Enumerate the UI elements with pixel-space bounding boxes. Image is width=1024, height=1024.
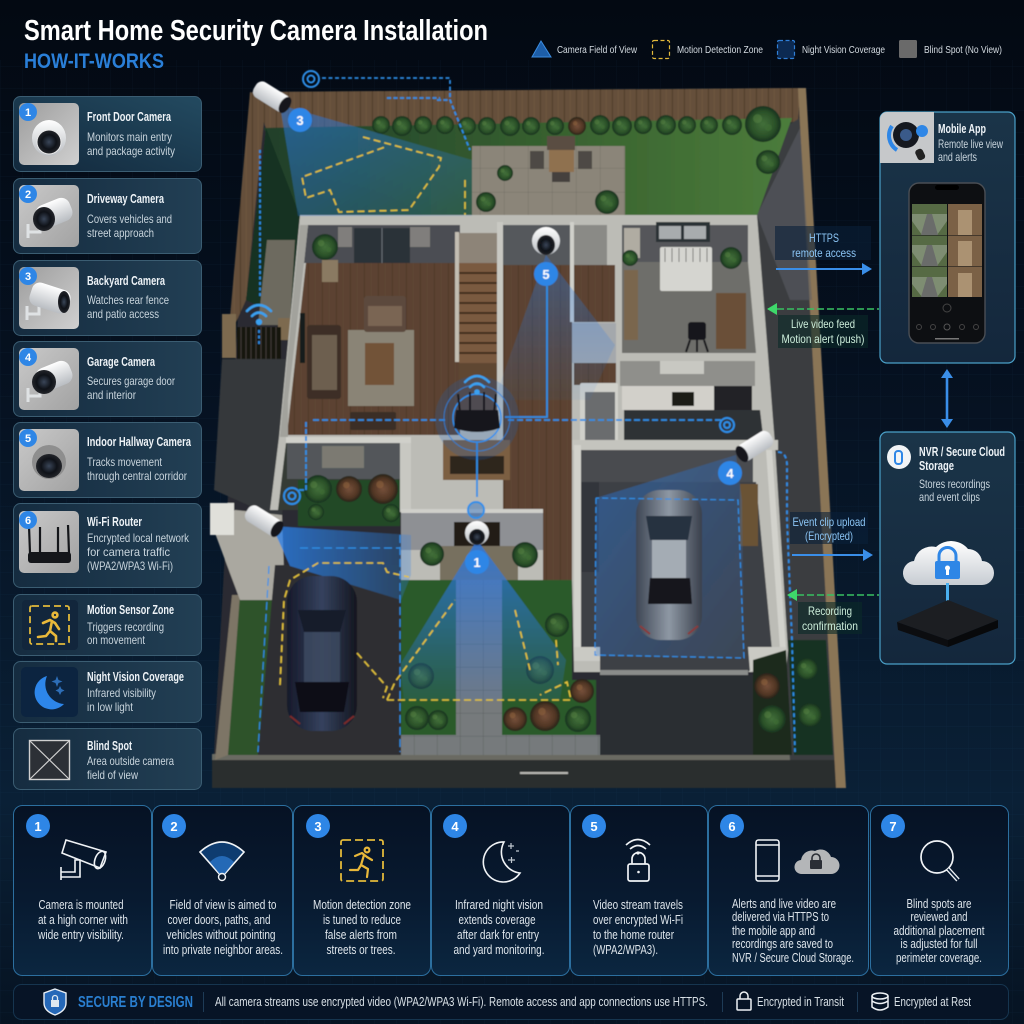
camera 1: front door: 1 <box>473 555 481 570</box>
stairs <box>455 232 497 413</box>
step 2 <box>152 806 292 976</box>
live video feed and motion alert <box>767 303 879 348</box>
camera 1: front door <box>465 521 489 574</box>
card: wi-fi router <box>14 504 202 588</box>
card: blind spot: field of view <box>87 768 138 782</box>
motion detection zones <box>280 137 571 700</box>
bedroom <box>622 222 756 353</box>
legend <box>532 40 1002 58</box>
card: backyard camera: Backyard Camera <box>87 274 166 288</box>
step 4: and yard monitoring. <box>454 942 544 957</box>
house shell <box>270 215 788 672</box>
panel: nvr and secure cloud storage: Stores recordings <box>919 477 990 491</box>
live video feed and motion alert: Motion alert (push) <box>782 332 864 346</box>
camera 5: hallway: 5 <box>542 267 550 282</box>
icon: lock <box>737 992 751 1010</box>
security footer bar: Encrypted in Transit <box>757 994 844 1009</box>
right planting <box>753 640 833 755</box>
card: driveway camera: 2 <box>25 189 31 201</box>
security footer bar: Encrypted at Rest <box>894 994 971 1009</box>
field of view: garage <box>596 455 744 658</box>
left boundary wall <box>210 503 285 760</box>
panel: camera and component list <box>14 96 202 790</box>
https remote access <box>775 226 872 275</box>
card: garage camera <box>14 342 202 416</box>
title block <box>24 15 488 73</box>
hallway <box>497 222 616 580</box>
floor plan illustration <box>210 71 846 788</box>
storage icon badge <box>887 445 911 469</box>
left side passage <box>246 128 300 325</box>
step 5: Video stream travels <box>593 897 683 912</box>
field of view: backyard <box>280 105 472 216</box>
card: wi-fi router: (WPA2/WPA3 Wi-Fi) <box>87 559 173 573</box>
camera 4: garage <box>718 428 776 485</box>
step 1: Camera is mounted <box>38 897 124 912</box>
card: garage camera: and interior <box>87 388 136 402</box>
card: indoor hallway camera: 5 <box>25 433 31 445</box>
card: motion sensor zone <box>14 594 202 656</box>
network and coverage links <box>258 78 795 752</box>
router <box>435 376 519 460</box>
phone showing camera views <box>909 183 985 343</box>
panel: nvr and secure cloud storage <box>880 432 1015 664</box>
card: wi-fi router: Wi-Fi Router <box>87 515 142 529</box>
kitchen and bath <box>580 361 764 444</box>
car: garage <box>636 490 702 640</box>
step 4: 4 <box>451 819 459 834</box>
panel: mobile app: Mobile App <box>938 122 986 136</box>
card: night vision coverage: in low light <box>87 700 134 714</box>
right fence <box>798 88 846 788</box>
event clip upload <box>790 512 873 561</box>
step 5: over encrypted Wi-Fi <box>593 912 683 927</box>
card: garage camera: Garage Camera <box>87 355 156 369</box>
gate <box>222 314 290 359</box>
icon: shield <box>44 989 66 1015</box>
step 3: is tuned to reduce <box>323 912 401 927</box>
mobile app thumbnail <box>880 112 934 163</box>
step 6: NVR / Secure Cloud Storage. <box>732 950 854 965</box>
front lawn and walkway <box>401 546 600 755</box>
card: front door camera: 1 <box>25 107 31 119</box>
wifi icon: router <box>465 376 489 394</box>
card: night vision coverage: Night Vision Coverage <box>87 670 184 684</box>
card: driveway camera <box>14 178 202 254</box>
patio furniture <box>476 136 619 214</box>
https remote access: HTTPS <box>809 231 839 245</box>
panel: mobile app <box>880 112 1015 363</box>
step 6: recordings are saved to <box>732 936 833 951</box>
card: backyard camera: and patio access <box>87 307 159 321</box>
step 4: after dark for entry <box>457 927 539 942</box>
step 5: (WPA2/WPA3). <box>593 942 658 957</box>
card: indoor hallway camera: Tracks movement <box>87 455 163 469</box>
card: driveway camera: street approach <box>87 226 154 240</box>
left fence <box>228 92 266 340</box>
cloud with lock <box>903 541 994 613</box>
card: garage camera: Secures garage door <box>87 374 175 388</box>
field of view: hallway <box>496 255 615 400</box>
step 6: the mobile app and <box>732 923 815 938</box>
step 1: at a high corner with <box>38 912 128 927</box>
step 1: 1 <box>34 819 42 834</box>
router table <box>443 440 510 480</box>
step 4: extends coverage <box>458 912 536 927</box>
front garden bushes <box>405 542 594 732</box>
card: wi-fi router: for camera traffic <box>87 545 170 559</box>
card: front door camera: and package activity <box>87 144 175 158</box>
card: blind spot <box>14 728 202 790</box>
camera 2: driveway <box>242 503 286 539</box>
card: night vision coverage: Infrared visibility <box>87 686 156 700</box>
security footer bar: SECURE BY DESIGN <box>78 994 193 1011</box>
step 1: wide entry visibility. <box>37 927 124 942</box>
camera 3: backyard: 3 <box>296 113 304 128</box>
step 2: Field of view is aimed to <box>170 897 276 912</box>
legend: Night Vision Coverage <box>802 44 885 56</box>
garage driveway <box>600 675 753 755</box>
card: night vision coverage <box>14 662 202 722</box>
live video feed and motion alert: Live video feed <box>791 317 855 331</box>
card: front door camera <box>14 96 202 172</box>
recording confirmation <box>787 589 879 634</box>
recording confirmation: confirmation <box>802 619 858 633</box>
https remote access: remote access <box>792 246 856 260</box>
camera 4: garage: 4 <box>726 466 734 481</box>
step 3: streets or trees. <box>326 942 396 957</box>
car: driveway <box>287 576 357 731</box>
step 4: Infrared night vision <box>455 897 543 912</box>
recording confirmation: Recording <box>808 604 852 618</box>
card: driveway camera: Covers vehicles and <box>87 212 172 226</box>
field of view: driveway <box>272 526 411 600</box>
icon: database <box>872 993 888 1010</box>
card: blind spot: Blind Spot <box>87 739 133 753</box>
panel: nvr and secure cloud storage: Storage <box>919 459 954 473</box>
card: wi-fi router: Encrypted local network <box>87 531 190 545</box>
panel: nvr and secure cloud storage: and event clips <box>919 490 980 504</box>
camera 5: hallway <box>532 227 560 286</box>
step 7: Blind spots are <box>906 896 972 911</box>
step 6: Alerts and live video are <box>732 896 836 911</box>
step 7 <box>870 806 1008 976</box>
step 2: cover doors, paths, and <box>168 912 270 927</box>
card: front door camera: Front Door Camera <box>87 110 172 124</box>
event clip upload: (Encrypted) <box>805 529 853 543</box>
field of view: front door <box>400 540 566 700</box>
panel: step cards <box>14 806 1008 976</box>
card: backyard camera <box>14 260 202 336</box>
legend: Camera Field of View <box>557 44 637 56</box>
wifi icon: side gate <box>247 305 271 324</box>
step 6: 6 <box>728 819 736 834</box>
card: indoor hallway camera: through central corridor <box>87 469 187 483</box>
step 2: vehicles without pointing <box>166 927 276 942</box>
panel: mobile app: and alerts <box>938 150 977 164</box>
arrow: app to storage <box>941 369 953 428</box>
event clip upload: Event clip upload <box>792 515 866 529</box>
side yard and blind spot <box>757 118 843 760</box>
entry block <box>401 509 543 550</box>
left paving <box>214 359 288 520</box>
courtyard <box>278 437 411 526</box>
step 7: is adjusted for full <box>900 936 978 951</box>
step 2: into private neighbor areas. <box>163 942 283 957</box>
ground base and street <box>212 88 842 788</box>
legend: Blind Spot (No View) <box>924 44 1002 56</box>
step 5: to the home router <box>593 927 675 942</box>
camera 3: backyard <box>250 79 312 132</box>
back lawn <box>264 118 792 216</box>
step 4 <box>432 806 570 976</box>
step 7: perimeter coverage. <box>896 950 982 965</box>
step 7: additional placement <box>894 923 985 938</box>
title block: HOW-IT-WORKS <box>24 50 164 73</box>
flow labels and arrows <box>767 226 953 634</box>
security footer bar: All camera streams use encrypted video (WPA2/WPA3 Wi-Fi). Remote access and app connections use HTTPS. <box>215 994 708 1009</box>
back fence <box>252 88 800 128</box>
card: indoor hallway camera <box>14 422 202 498</box>
card: backyard camera: 3 <box>25 271 31 283</box>
step 6 <box>708 806 868 976</box>
patio <box>472 146 625 216</box>
card: motion sensor zone: Triggers recording <box>87 620 164 634</box>
main driveway <box>258 565 401 755</box>
living room <box>280 225 460 437</box>
title block: Smart Home Security Camera Installation <box>24 15 488 47</box>
step 5 <box>570 806 708 976</box>
card: backyard camera: Watches rear fence <box>87 293 169 307</box>
security footer bar <box>14 984 1008 1020</box>
left lawn strip <box>228 595 274 755</box>
card: driveway camera: Driveway Camera <box>87 192 165 206</box>
card: garage camera: 4 <box>25 352 32 364</box>
step 6: delivered via HTTPS to <box>732 909 829 924</box>
step 5: 5 <box>590 819 598 834</box>
back hedge row <box>372 106 781 174</box>
step 1 <box>14 806 152 976</box>
step 3: false alerts from <box>325 927 397 942</box>
field of view: blind spot wedge <box>757 128 812 300</box>
card: front door camera: Monitors main entry <box>87 130 172 144</box>
step 3: Motion detection zone <box>313 897 411 912</box>
card: blind spot: Area outside camera <box>87 754 174 768</box>
garage <box>572 440 786 675</box>
card: motion sensor zone: Motion Sensor Zone <box>87 603 174 617</box>
nvr box <box>897 600 998 647</box>
step 3 <box>294 806 430 976</box>
step 7: reviewed and <box>910 909 968 924</box>
step 3: 3 <box>314 819 322 834</box>
step 7: 7 <box>889 819 897 834</box>
card: motion sensor zone: on movement <box>87 633 146 647</box>
legend: Motion Detection Zone <box>677 44 763 56</box>
signal icons near cameras <box>284 71 734 518</box>
card: indoor hallway camera: Indoor Hallway Camera <box>87 435 192 449</box>
step 2: 2 <box>170 819 178 834</box>
card: wi-fi router: 6 <box>25 515 31 527</box>
